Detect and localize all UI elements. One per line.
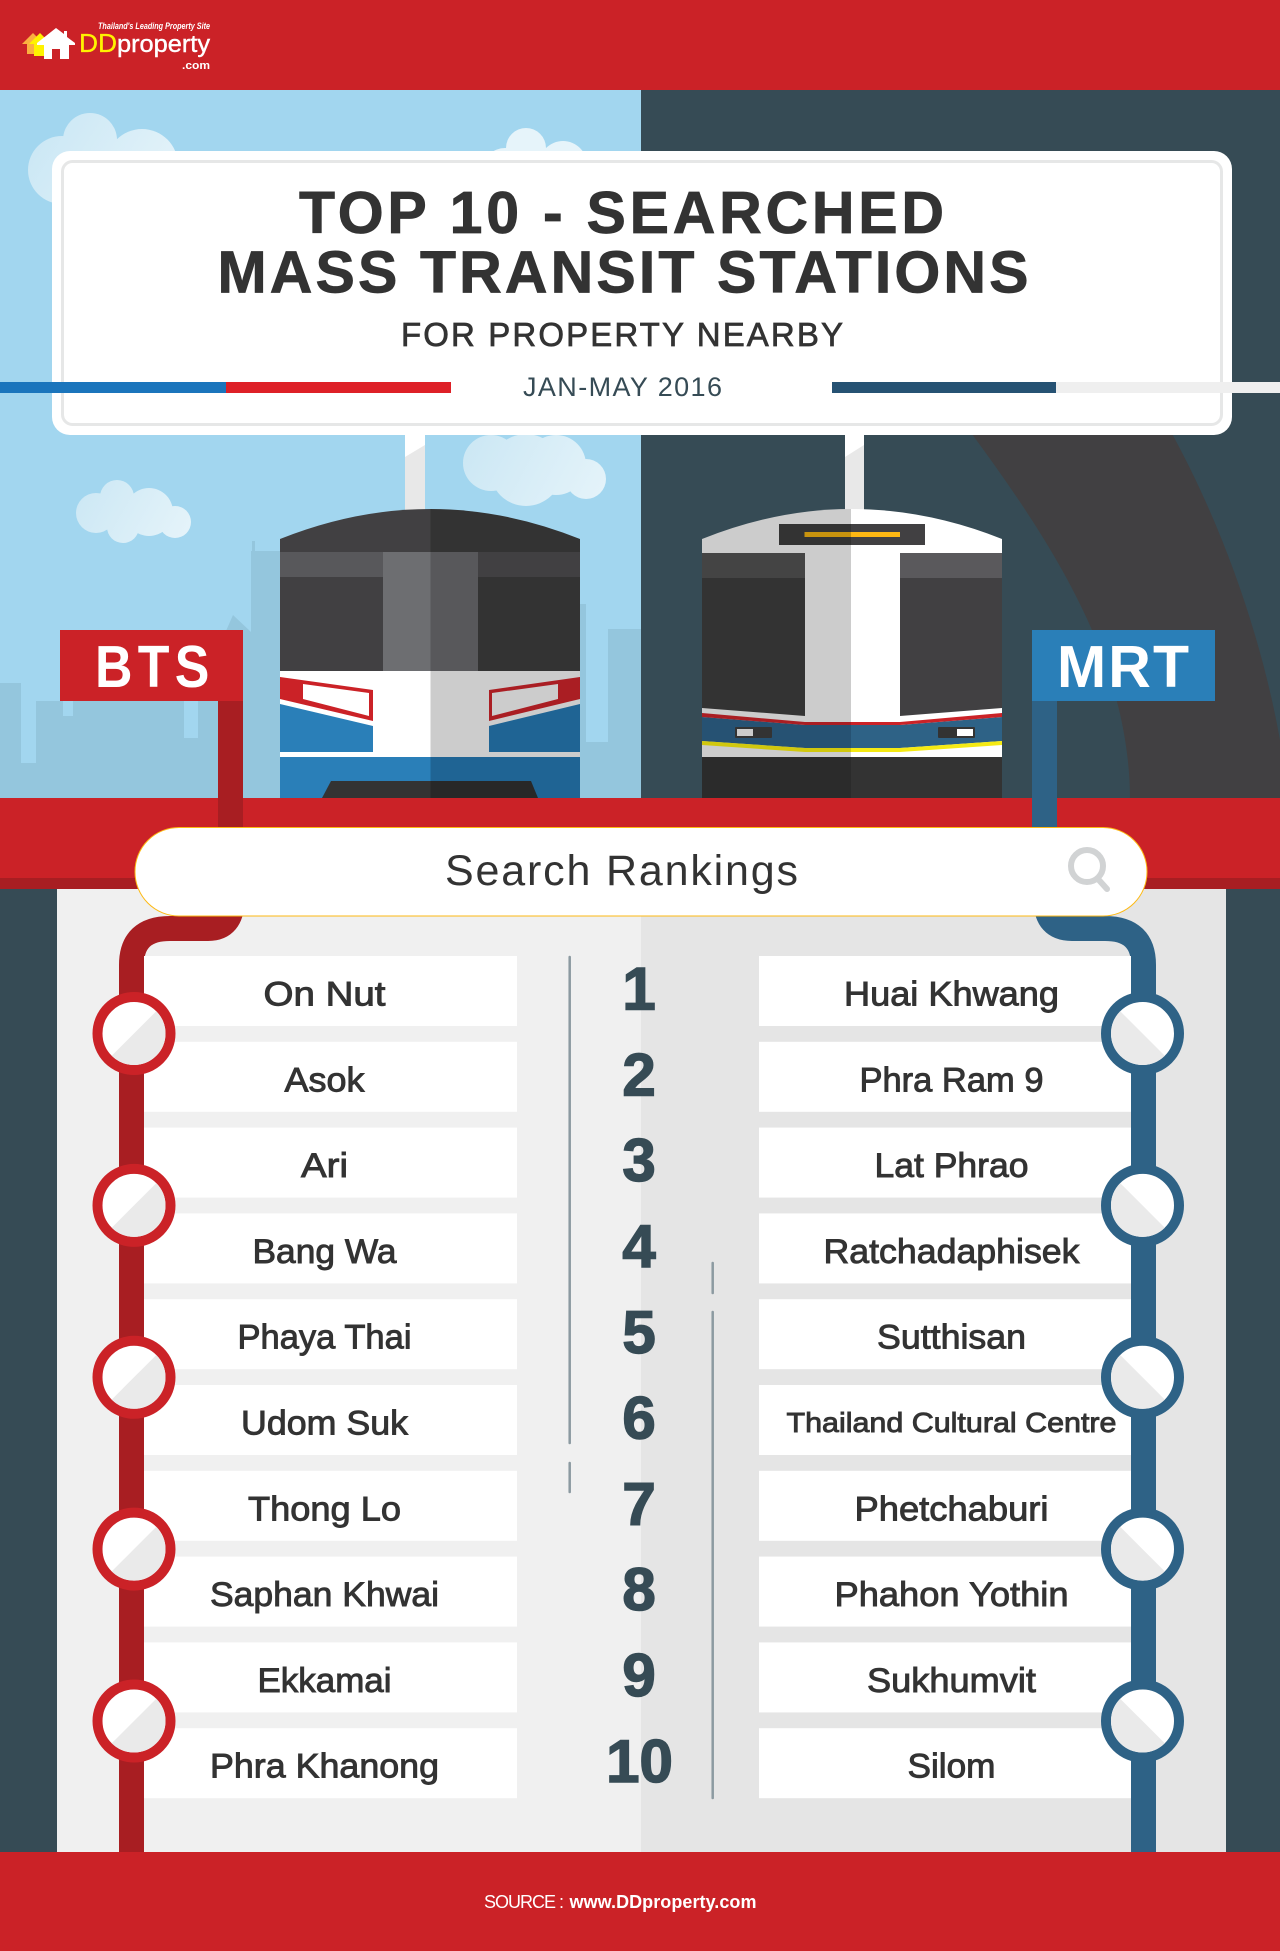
BTS station names (210, 976, 439, 1786)
rank numbers: 3 (622, 1127, 656, 1194)
footer bar (0, 1852, 1280, 1951)
lower panel background (0, 889, 1280, 1852)
logo: .com (182, 60, 210, 72)
MRT station names: Phetchaburi (854, 1490, 1048, 1528)
MRT station names: Ratchadaphisek (824, 1233, 1081, 1271)
MRT sign (1032, 630, 1215, 827)
title signboard (52, 151, 1232, 435)
icon: magnifier (1071, 850, 1107, 889)
rank numbers: 7 (622, 1470, 656, 1537)
BTS station names: Ekkamai (258, 1662, 392, 1700)
BTS station names: On Nut (264, 976, 386, 1014)
BTS station names: Saphan Khwai (210, 1576, 439, 1614)
BTS station markers (98, 997, 170, 1758)
red platform (0, 798, 1280, 889)
search bar (135, 828, 1147, 916)
BTS station names: Udom Suk (241, 1404, 409, 1442)
sign posts (405, 430, 864, 515)
rank numbers (606, 956, 673, 1795)
MRT sign: MRT (1057, 634, 1189, 700)
MRT line pipe (1046, 900, 1144, 1852)
road curve on MRT side (969, 430, 1280, 800)
header bar (0, 0, 1280, 90)
MRT station names: Silom (908, 1748, 996, 1786)
MRT station names: Thailand Cultural Centre (786, 1407, 1116, 1438)
MRT station names: Phahon Yothin (834, 1576, 1068, 1614)
MRT station names: Sukhumvit (867, 1662, 1037, 1700)
logo: DD (79, 28, 117, 58)
rank numbers: 9 (622, 1642, 656, 1709)
source text: SOURCE : (484, 1892, 564, 1912)
BTS station names: Bang Wa (252, 1233, 397, 1271)
BTS station names: Ari (301, 1147, 348, 1185)
MRT station markers (1106, 997, 1179, 1758)
BTS station names: Phaya Thai (238, 1319, 412, 1357)
MRT station names: Lat Phrao (874, 1147, 1028, 1185)
logo: property (117, 31, 210, 58)
destination display (779, 524, 925, 545)
date: JAN-MAY 2016 (523, 372, 722, 402)
BTS station names: Thong Lo (248, 1490, 401, 1528)
center divider lines (570, 957, 713, 1798)
source text: www.DDproperty.com (568, 1892, 756, 1912)
title text (218, 180, 1028, 306)
clouds (28, 113, 606, 543)
rank numbers: 1 (622, 956, 656, 1023)
rank numbers: 4 (622, 1213, 656, 1280)
title text: MASS TRANSIT STATIONS (218, 240, 1028, 306)
logo: Thailand's Leading Property Site (98, 21, 211, 32)
MRT train (702, 509, 1002, 798)
BTS station names: Phra Khanong (210, 1748, 439, 1786)
icon: houses (22, 28, 75, 59)
BTS line pipe (132, 900, 232, 1852)
rank numbers: 8 (622, 1556, 656, 1623)
search bar: Search Rankings (445, 847, 798, 895)
MRT station names: Huai Khwang (844, 976, 1059, 1014)
rank numbers: 6 (622, 1385, 656, 1452)
city skyline (0, 541, 641, 798)
MRT station names (786, 976, 1116, 1786)
BTS train (280, 509, 580, 798)
rank numbers: 10 (606, 1728, 673, 1795)
subtitle: FOR PROPERTY NEARBY (401, 316, 843, 353)
BTS sign: BTS (95, 634, 215, 700)
BTS station names: Asok (284, 1061, 366, 1099)
rank numbers: 2 (622, 1041, 656, 1108)
MRT station names: Phra Ram 9 (860, 1061, 1044, 1099)
MRT station names: Sutthisan (877, 1319, 1026, 1357)
title text: TOP 10 - SEARCHED (299, 180, 944, 246)
BTS sign (60, 630, 243, 827)
scene background: sky and dark sides (0, 90, 1280, 810)
BTS station cards (144, 956, 517, 1798)
line stripes (0, 382, 1280, 393)
rank numbers: 5 (622, 1299, 656, 1366)
logo (22, 21, 211, 72)
MRT station cards (759, 956, 1131, 1798)
